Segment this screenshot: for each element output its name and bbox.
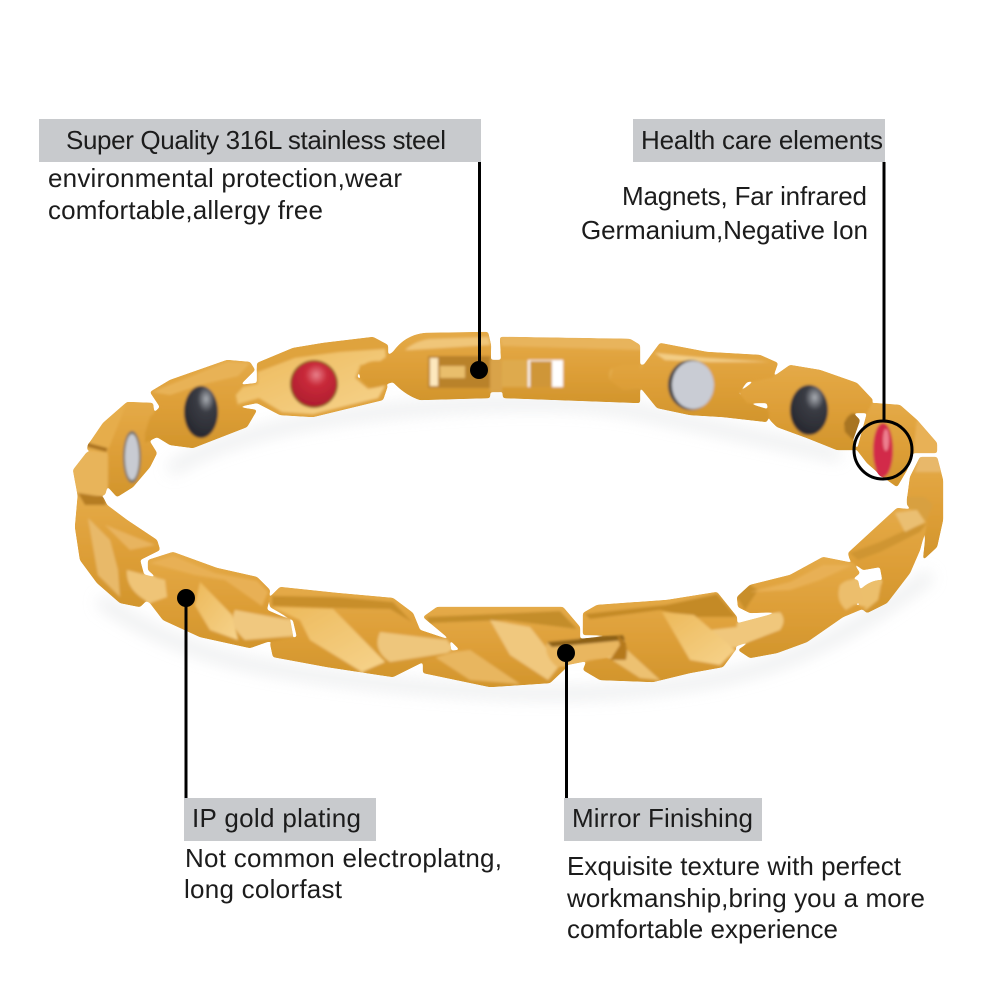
clasp: left half <box>360 332 491 400</box>
soft shadow <box>100 403 930 693</box>
panel: mirror finishing heading <box>564 798 762 841</box>
text block: steel description <box>48 163 402 225</box>
panel: IP gold plating heading <box>184 798 376 841</box>
text block: health care description: Germanium,Negative Ion <box>581 215 868 245</box>
text block: plating description: Not common electroplatng, <box>185 843 502 873</box>
link: black magnet <box>145 360 257 448</box>
text block: steel description: comfortable,allergy free <box>48 195 323 225</box>
link: grey magnet <box>108 402 157 497</box>
text block: mirror description: workmanship,bring you a more <box>566 883 925 913</box>
callout line: plating <box>177 589 195 798</box>
link: right black magnet <box>740 365 873 450</box>
text block: mirror description: comfortable experience <box>567 914 838 944</box>
link: twist 2 <box>148 552 293 648</box>
link: twist 1 <box>75 493 167 607</box>
text block: health care description: Magnets, Far infrared <box>622 181 867 211</box>
text block: mirror description: Exquisite texture with perfect <box>567 851 902 881</box>
link: twist 4 centre <box>423 607 627 687</box>
link: twist 7 <box>848 508 927 613</box>
chain links <box>73 332 943 687</box>
callout line: health care circle <box>854 162 912 479</box>
callout line: mirror <box>557 644 575 798</box>
link: twist 3 <box>270 587 451 677</box>
callout line: steel <box>470 162 488 379</box>
panel: IP gold plating heading: IP gold plating <box>192 803 361 833</box>
clasp: right half <box>490 337 645 403</box>
panel: steel heading <box>39 119 481 162</box>
text block: mirror description <box>566 851 925 944</box>
panel: health care heading <box>633 119 885 162</box>
text block: plating description <box>184 843 502 904</box>
link: red magnet <box>233 337 388 417</box>
link: left end tile <box>73 402 127 497</box>
panel: steel heading: Super Quality 316L stainless steel <box>66 125 446 155</box>
text block: steel description: environmental protection,wear <box>48 163 402 193</box>
link: right end tile <box>907 457 943 560</box>
panel: mirror finishing heading: Mirror Finishing <box>572 803 753 833</box>
link: twist 5 <box>583 592 737 682</box>
link: red magnet in circle <box>857 403 937 487</box>
link: twist 6 <box>711 557 867 658</box>
text block: health care description <box>581 181 868 245</box>
panel: health care heading: Health care elements <box>641 125 883 155</box>
link: right grey magnet <box>610 343 778 422</box>
text block: plating description: long colorfast <box>184 874 343 904</box>
bracelet <box>73 332 943 693</box>
